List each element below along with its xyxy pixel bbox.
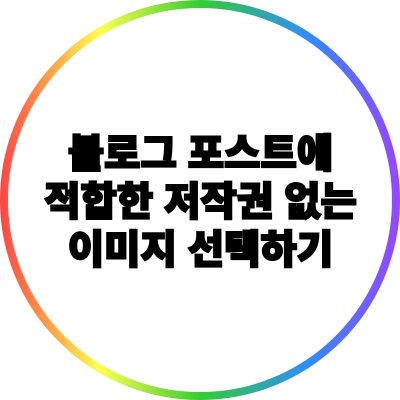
title line 2: 적합한 저작권 없는 <box>44 180 357 224</box>
title <box>44 132 357 272</box>
title line 3: 이미지 선택하기 <box>68 228 333 272</box>
title line 1: 블로그 포스트에 <box>68 132 333 176</box>
